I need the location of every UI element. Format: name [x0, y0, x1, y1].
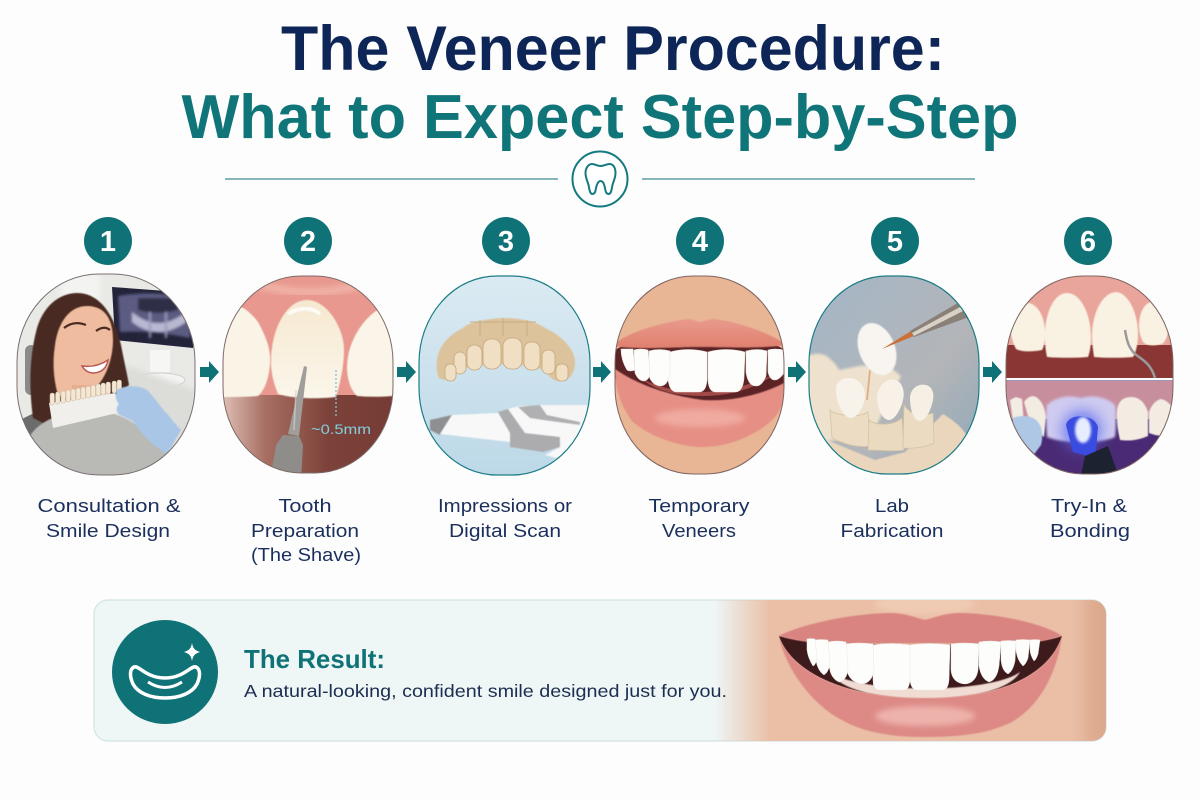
step 6 image: try-in and bonding [1006, 276, 1174, 474]
step 2 label: Preparation [251, 520, 359, 541]
step 5 label: Fabrication [840, 520, 944, 541]
step 4 number: 4 [692, 226, 708, 258]
step 5 number [871, 217, 919, 265]
step 3 label: Impressions or [438, 495, 572, 516]
result icon [112, 620, 218, 724]
step 2 number [284, 217, 332, 265]
step 4 label: Temporary [648, 495, 750, 516]
step 3 label: Digital Scan [449, 520, 561, 541]
step 5 number: 5 [887, 226, 903, 258]
arrow 3 [593, 361, 611, 383]
step 6 number: 6 [1080, 226, 1096, 258]
panel: the result [93, 599, 1107, 742]
step 2 label: (The Shave) [251, 544, 361, 565]
step 1 number: 1 [100, 226, 116, 258]
step 5 image: lab fabrication [805, 272, 985, 478]
divider with tooth icon [225, 152, 975, 206]
step 2 label [251, 495, 361, 565]
result photo: smile [720, 600, 1106, 741]
intraoral scanner [430, 405, 588, 459]
step 2 image: tooth preparation: ~0.5mm [311, 421, 371, 437]
arrow 4 [788, 361, 806, 383]
step 1 image: consultation [10, 270, 200, 480]
step 1 label: Smile Design [46, 520, 170, 541]
step 6 label: Bonding [1050, 520, 1130, 541]
step 4 number [676, 217, 724, 265]
step 5 label: Lab [875, 495, 909, 516]
title: The Veneer Procedure: [281, 14, 945, 84]
step 3 label [438, 495, 572, 541]
step 4 label: Veneers [662, 520, 736, 541]
step 2 label: Tooth [278, 495, 332, 516]
step 3 number [482, 217, 530, 265]
step 4 label [648, 495, 750, 541]
arrow 1 [200, 361, 219, 383]
result heading: The Result: [244, 644, 385, 674]
step 4 image: temporary veneers [614, 276, 784, 474]
step 1 label [38, 495, 181, 541]
step 6 label [1050, 495, 1130, 541]
title [182, 14, 1018, 152]
step 6 number [1064, 217, 1112, 265]
step 3 number: 3 [498, 226, 514, 258]
step 5 label [840, 495, 944, 541]
step 3 image: digital scan [415, 272, 595, 478]
step 2 image: tooth preparation [222, 276, 394, 474]
arrow 2 [397, 361, 416, 383]
step 2 number: 2 [300, 226, 316, 258]
step 6 label: Try-In & [1051, 495, 1128, 516]
arrow 5 [983, 361, 1002, 383]
result description: A natural-looking, confident smile designed just for you. [244, 681, 727, 701]
title: What to Expect Step-by-Step [182, 83, 1018, 152]
step 1 number [84, 217, 132, 265]
step 1 label: Consultation & [38, 495, 181, 516]
